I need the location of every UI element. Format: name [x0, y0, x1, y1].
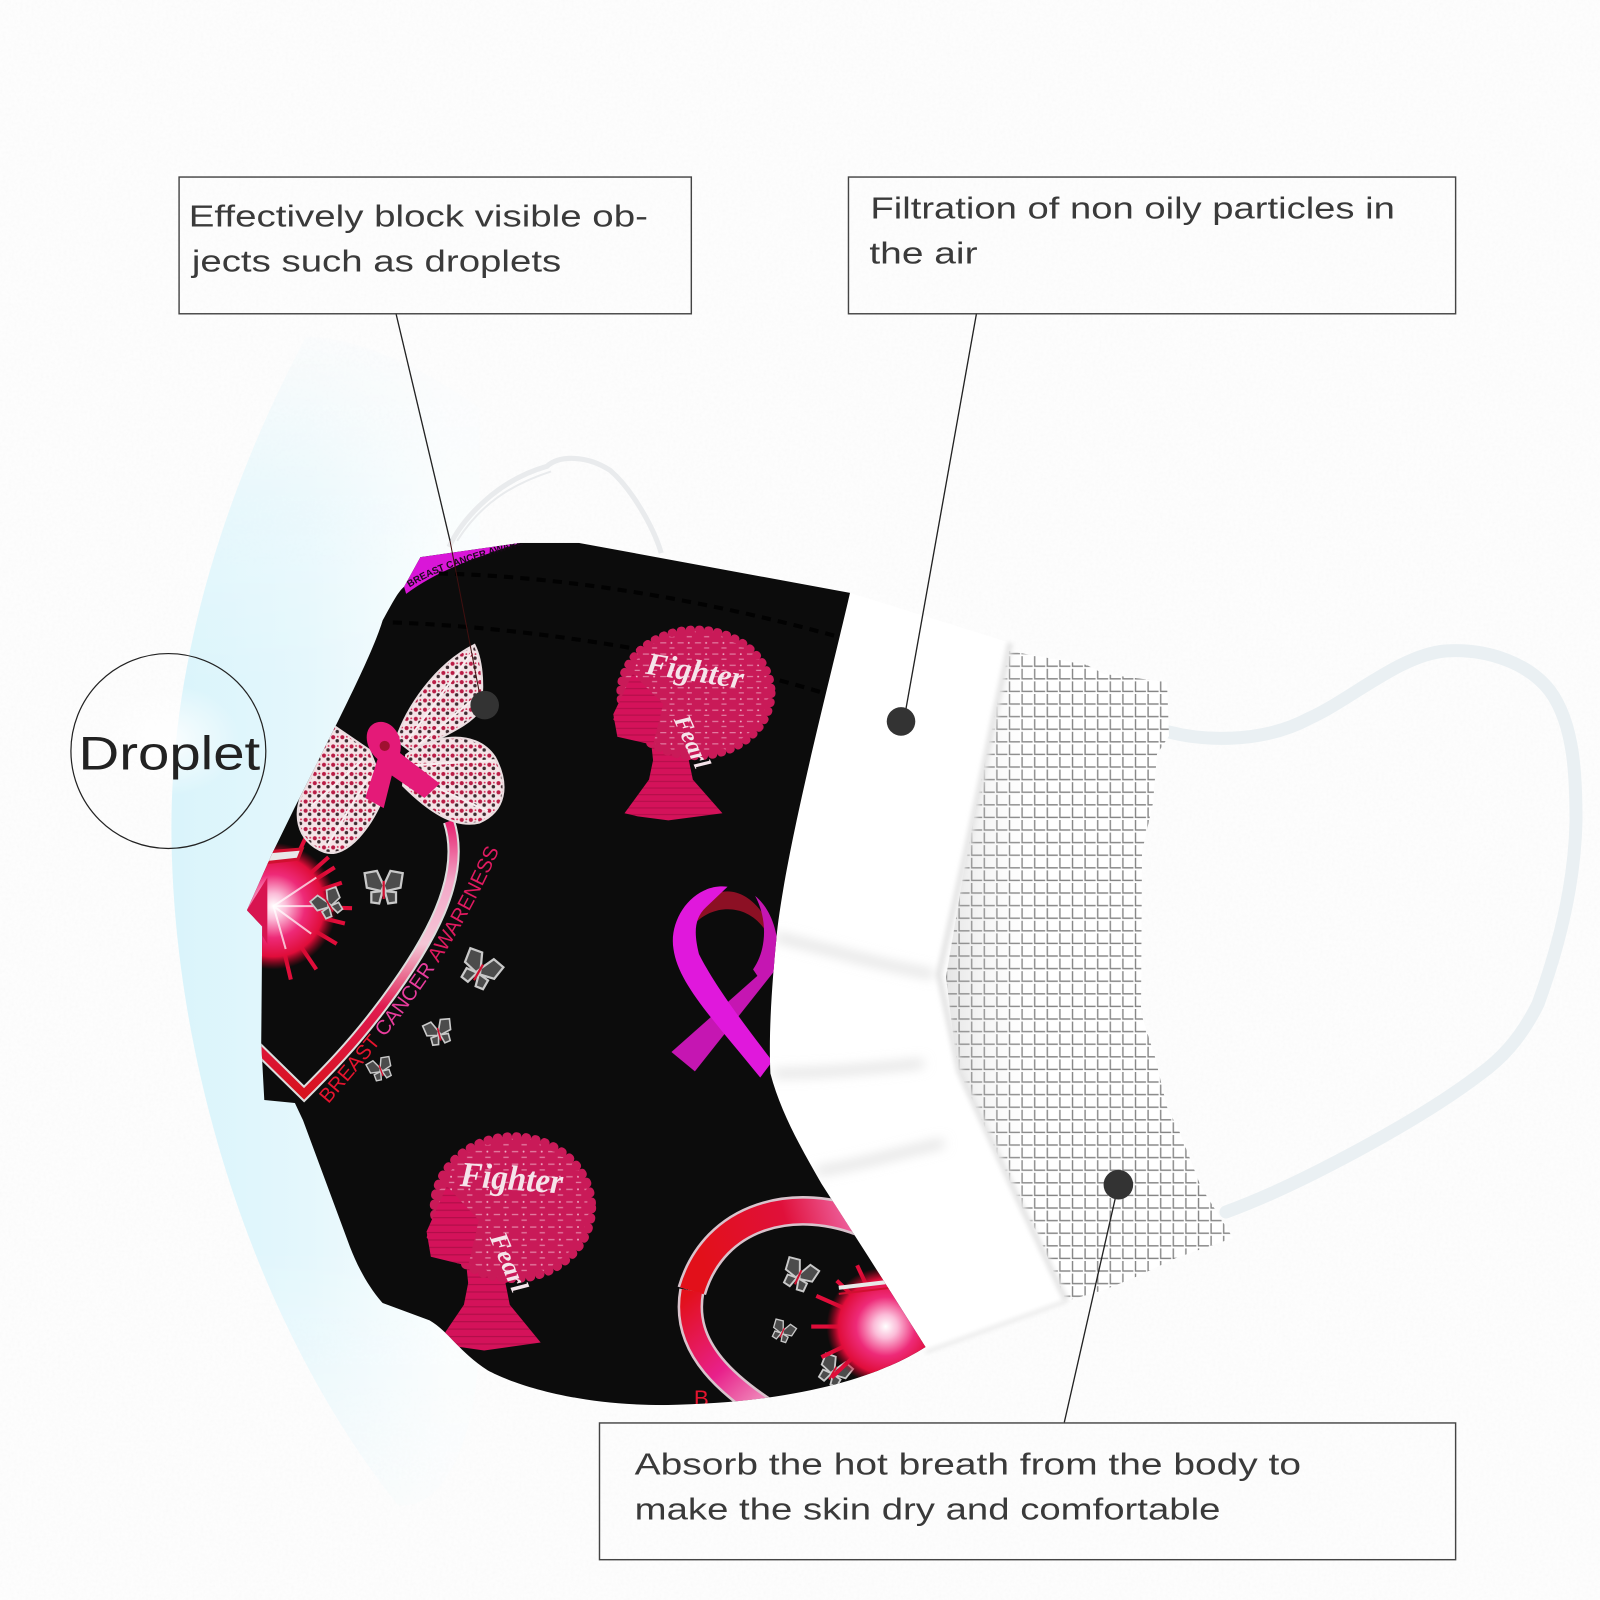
- pleat shadows: [773, 937, 944, 1171]
- stitching: [393, 573, 842, 694]
- callout: absorb breath: [599, 1423, 1456, 1560]
- light burst lower: [811, 1264, 926, 1379]
- leader line: filtration: [887, 313, 977, 736]
- callout: block droplets: jects such as droplets: [191, 244, 561, 278]
- leader line: absorb: [1064, 1170, 1133, 1422]
- mesh inner layer: [946, 651, 1230, 1300]
- woman head: fighter top: Fighter: [643, 646, 747, 696]
- droplet circle: [71, 654, 266, 848]
- droplet spray zone: [172, 392, 408, 1440]
- callout: absorb breath: make the skin dry and comfortable: [635, 1492, 1220, 1526]
- printed black mask: [247, 542, 926, 1406]
- callout: block droplets: [179, 177, 691, 314]
- droplet label: Droplet: [79, 727, 260, 779]
- callout: filtration: the air: [869, 236, 978, 270]
- top magenta band: BREAST CANCER AWARENESS: [406, 543, 522, 588]
- woman head: fighter bottom: Fearl: [484, 1226, 535, 1298]
- breast cancer awareness text: BREAST CANCER AWARENESS: [318, 846, 498, 1103]
- wing veins: [311, 653, 495, 847]
- callout: filtration: [848, 177, 1456, 314]
- woman head: fighter top: [613, 630, 771, 820]
- top magenta band: [404, 543, 522, 594]
- woman head: fighter bottom: Fighter: [458, 1155, 565, 1202]
- woman head: fighter top: Fearl: [668, 710, 715, 773]
- awareness ribbon magenta: [671, 886, 788, 1078]
- ear loop: right: [1169, 651, 1576, 1212]
- ear loop: top: [449, 458, 661, 553]
- callout: absorb breath: Absorb the hot breath from the body to: [635, 1447, 1301, 1481]
- white mask band: [735, 593, 1066, 1352]
- small butterflies: [309, 871, 854, 1390]
- butterfly with ribbon: [298, 645, 504, 853]
- light burst left: [247, 838, 352, 980]
- woman head: fighter bottom: [427, 1137, 592, 1350]
- heart outline: [255, 821, 454, 1094]
- callout: filtration: Filtration of non oily particles in: [870, 191, 1395, 225]
- lower heart arc: [690, 1211, 867, 1429]
- leader line: droplets: [396, 313, 499, 719]
- callout: block droplets: Effectively block visible ob-: [189, 200, 648, 234]
- clipped lower awareness letters: B: [694, 1386, 709, 1411]
